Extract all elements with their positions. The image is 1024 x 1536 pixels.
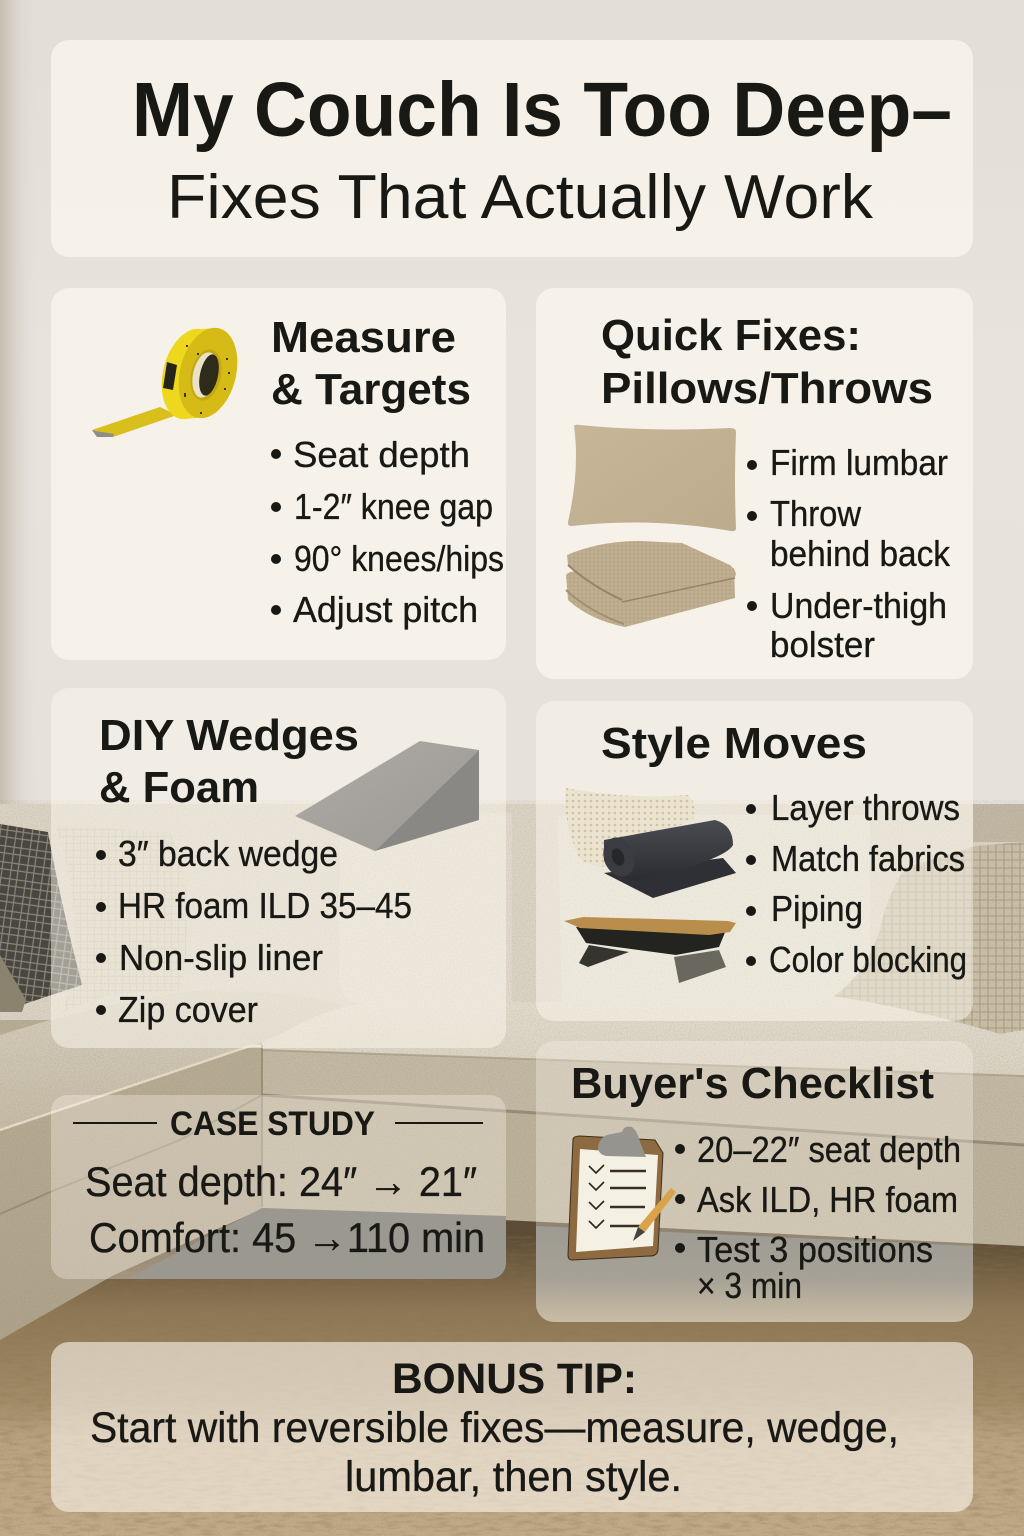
panel: title	[51, 40, 973, 257]
text: comfort result: Comfort: 45 →110 min	[89, 1214, 485, 1261]
text block: quick fixes bullets: Firm lumbar	[770, 442, 948, 483]
panel: bonus tip	[51, 1342, 973, 1512]
icon: folded throw	[566, 541, 736, 627]
text block: style bullets: Match fabrics	[771, 838, 965, 879]
text block: checklist bullets: Ask ILD, HR foam	[697, 1179, 958, 1220]
panel: measure and targets	[51, 288, 506, 660]
text block: measure bullets	[271, 434, 504, 630]
text: seat depth result: Seat depth: 24″ → 21″	[85, 1158, 477, 1205]
heading: measure and targets: Measure	[271, 313, 456, 362]
text block: DIY bullets: Zip cover	[118, 989, 258, 1030]
heading: quick fixes	[601, 311, 933, 413]
text block: quick fixes bullets: behind back	[770, 533, 951, 574]
text block: quick fixes bullets: Throw	[770, 493, 862, 534]
heading: measure and targets: & Targets	[271, 365, 471, 414]
text block: DIY bullets	[96, 833, 412, 1030]
text block: quick fixes bullets: bolster	[770, 624, 875, 665]
heading: measure and targets	[271, 313, 471, 414]
text block: measure bullets: Adjust pitch	[293, 589, 478, 630]
text block: style bullets: Color blocking	[769, 939, 967, 980]
text block: style bullets: Layer throws	[771, 787, 960, 828]
heading: quick fixes: Pillows/Throws	[601, 364, 933, 413]
heading: main title: My Couch Is Too Deep–	[132, 67, 952, 153]
heading: DIY wedges	[99, 711, 359, 812]
text block: quick fixes bullets: Under-thigh	[770, 585, 947, 626]
panel: buyer's checklist	[536, 1041, 973, 1322]
heading: DIY wedges: & Foam	[99, 763, 259, 812]
text block: measure bullets: 1-2″ knee gap	[294, 486, 493, 527]
text block: checklist bullets	[675, 1129, 961, 1306]
text block: bonus tip body: Start with reversible fixes—measure, wedge,	[90, 1404, 899, 1452]
panel: quick fixes pillows and throws	[536, 288, 973, 679]
icon: grey foam wedge	[295, 741, 479, 851]
text block: DIY bullets: Non-slip liner	[119, 937, 323, 978]
icon: lumbar pillow	[568, 425, 736, 531]
text block: bonus tip body	[90, 1404, 899, 1501]
icon: clipboard with pencil	[568, 1127, 676, 1260]
panel: case study	[51, 1095, 506, 1279]
text block: DIY bullets: HR foam ILD 35–45	[118, 885, 412, 926]
text block: style bullets	[746, 787, 967, 980]
icon: rolled throws	[565, 788, 736, 898]
heading: subtitle: Fixes That Actually Work	[167, 163, 874, 232]
text block: measure bullets: Seat depth	[293, 434, 470, 475]
text block: measure bullets: 90° knees/hips	[294, 538, 504, 579]
panel: style moves	[536, 701, 973, 1021]
text block: quick fixes bullets	[747, 442, 951, 665]
icon: yellow tape measure	[92, 322, 246, 437]
text block: bonus tip body: lumbar, then style.	[345, 1453, 682, 1501]
heading: style moves: Style Moves	[601, 719, 867, 768]
text block: checklist bullets: × 3 min	[697, 1265, 802, 1306]
heading: quick fixes: Quick Fixes:	[601, 311, 861, 360]
panel: DIY wedges and foam	[51, 688, 506, 1048]
text block: checklist bullets: Test 3 positions	[697, 1229, 933, 1270]
text block: DIY bullets: 3″ back wedge	[118, 833, 338, 874]
heading: case study: CASE STUDY	[170, 1105, 375, 1143]
heading: DIY wedges: DIY Wedges	[99, 711, 359, 760]
icon: wooden lap tray	[564, 917, 736, 983]
heading: buyer's checklist: Buyer's Checklist	[571, 1059, 934, 1108]
text block: style bullets: Piping	[771, 888, 863, 929]
text block: checklist bullets: 20–22″ seat depth	[697, 1129, 961, 1170]
heading: bonus tip: BONUS TIP:	[392, 1355, 637, 1403]
